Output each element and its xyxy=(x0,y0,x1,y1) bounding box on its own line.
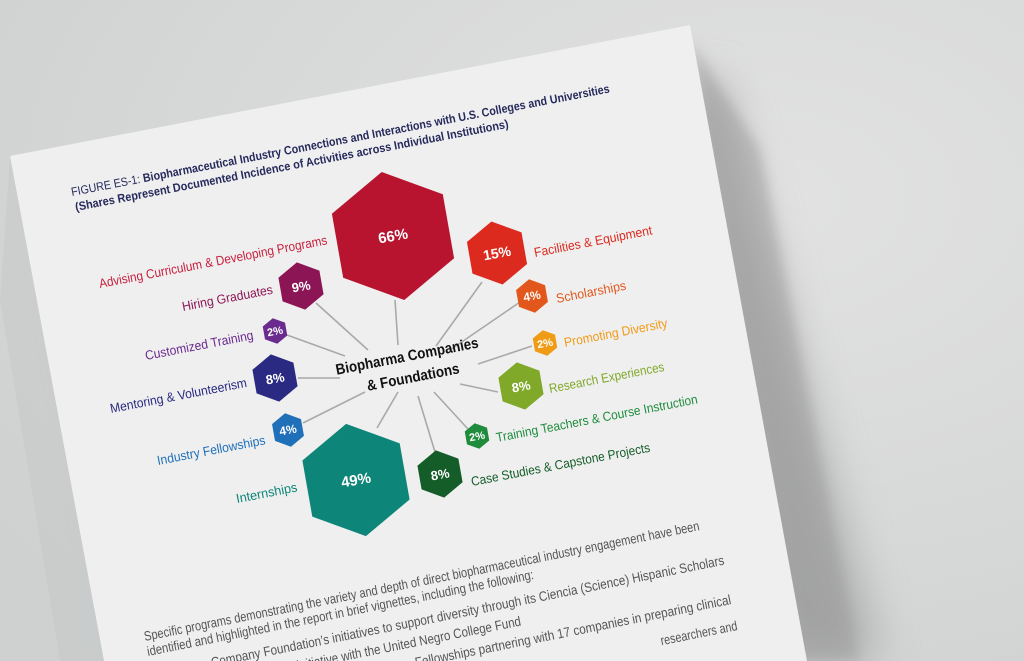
hex: 2% customized xyxy=(262,318,288,344)
hex: 2% training: 2% xyxy=(468,430,486,444)
hub label xyxy=(336,340,478,390)
hex: 49% internships: 49% xyxy=(340,470,372,491)
hex: 4% scholarships: 4% xyxy=(522,288,542,304)
hex: 2% training xyxy=(464,423,490,449)
left labels: Customized Training xyxy=(144,327,255,363)
hex: 49% internships xyxy=(302,424,410,536)
hub label: & Foundations xyxy=(365,360,461,395)
hex: 9% hiring xyxy=(278,262,324,310)
shadow under paper xyxy=(699,70,889,661)
body text: researchers and xyxy=(659,618,739,648)
body text: Specific programs demonstrating the variety and depth of direct biopharmaceutical industry engagement have been xyxy=(143,518,701,644)
hex: 2% customized: 2% xyxy=(266,325,284,339)
right labels: Research Experiences xyxy=(548,359,666,396)
left labels: Internships xyxy=(235,479,299,506)
left labels: Advising Curriculum & Developing Programs xyxy=(98,232,329,291)
right labels xyxy=(470,222,699,489)
left labels: Industry Fellowships xyxy=(156,432,267,468)
hex: 2% promoting: 2% xyxy=(536,337,554,351)
hex: 8% case studies xyxy=(417,450,463,498)
title: FIGURE ES-1: Biopharmaceutical Industry Connections and Interactions with U.S. Colleges and Universities xyxy=(70,82,611,199)
hub label: Biopharma Companies xyxy=(334,335,480,379)
right labels: Training Teachers & Course Instruction xyxy=(495,391,699,445)
hex: 15% facilities: 15% xyxy=(482,243,513,263)
title: (Shares Represent Documented Incidence of Activities across Individual Institutions) xyxy=(74,117,510,214)
paper xyxy=(10,25,807,661)
hex: 8% mentoring xyxy=(252,354,298,402)
hex: 4% scholarships xyxy=(516,279,548,313)
left labels: Hiring Graduates xyxy=(181,282,274,314)
right labels: Promoting Diversity xyxy=(563,315,669,350)
right labels: Case Studies & Capstone Projects xyxy=(470,440,652,489)
connector lines xyxy=(287,282,532,452)
right labels: Scholarships xyxy=(555,278,628,306)
hex: 15% facilities xyxy=(466,222,528,284)
hex: 4% fellowships xyxy=(272,413,304,447)
hex: 8% research: 8% xyxy=(511,377,532,396)
hex: 8% research xyxy=(498,362,544,410)
hex: 4% fellowships: 4% xyxy=(278,422,298,438)
hex: 2% promoting xyxy=(532,330,558,356)
hex: 66% advising: 66% xyxy=(377,226,409,247)
body text: identified and highlighted in the report in brief vignettes, including the following: xyxy=(146,567,535,659)
hex: 8% case studies: 8% xyxy=(430,465,451,484)
hex: 66% advising xyxy=(332,172,454,300)
left labels xyxy=(98,232,329,506)
right labels: Facilities & Equipment xyxy=(533,222,654,260)
left labels: Mentoring & Volunteerism xyxy=(109,375,248,416)
hex: 8% mentoring: 8% xyxy=(265,369,286,388)
hex: 9% hiring: 9% xyxy=(291,277,312,296)
